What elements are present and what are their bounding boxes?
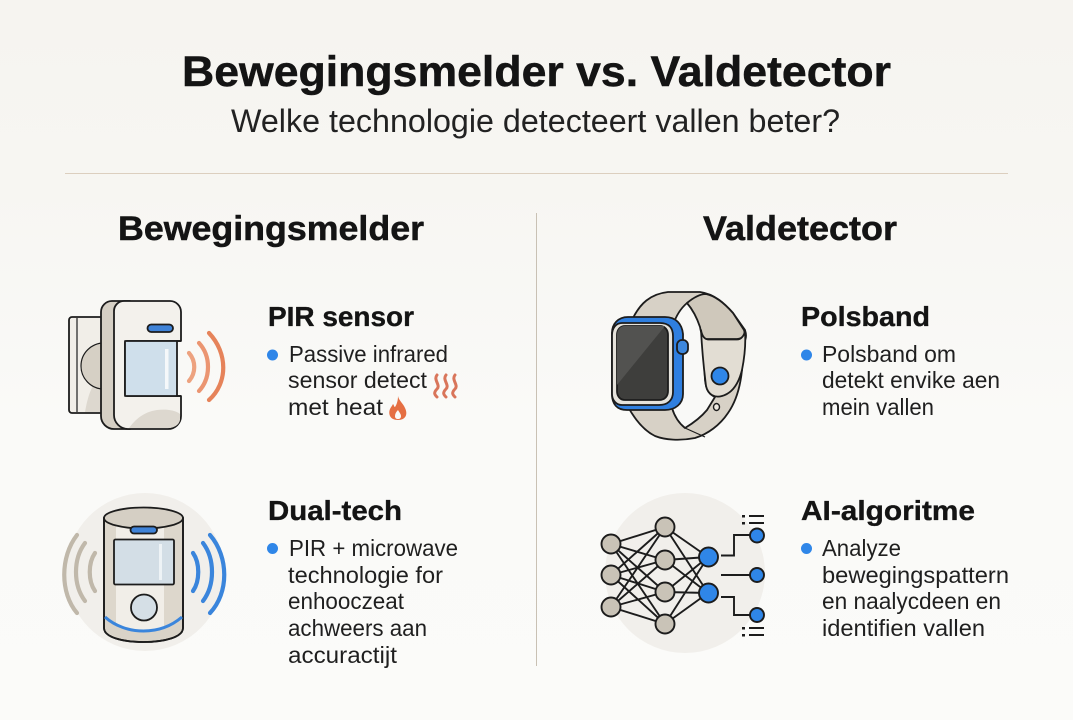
text: Polsband: Polsband om [822,341,956,367]
text: PIR sensor: PIR sensor [268,301,414,332]
icon: flame [389,396,406,420]
icon: neural network [602,493,765,653]
text: AI-algoritme [801,495,1009,641]
text: Dual-tech [267,495,458,668]
text: Dual-tech: enhooczeat [288,588,405,614]
text: Polsband: mein vallen [822,394,934,420]
icon: heat waves [435,375,456,397]
text: Dual-tech: Dual-tech [268,495,402,526]
title: Bewegingsmelder vs. Valdetector [182,48,891,96]
text: Dual-tech: accuractijt [288,642,398,668]
text: PIR sensor: Passive infrared [289,341,448,367]
text: Polsband [801,301,1000,420]
text: AI-algoritme: Analyze [822,535,901,561]
icon: PIR sensor [69,301,181,429]
icon: smartwatch [612,292,746,440]
text: AI-algoritme: AI-algoritme [801,495,975,526]
text: AI-algoritme: identifien vallen [822,615,985,641]
text: Dual-tech: PIR + microwave [289,535,458,561]
text: Polsband: Polsband [801,301,930,332]
icon: grey and blue waves [64,535,224,613]
heading: Bewegingsmelder: Bewegingsmelder [118,210,424,248]
text: AI-algoritme: bewegingspattern [822,562,1009,588]
icon: dual-tech sensor [66,493,224,651]
text: AI-algoritme: en naalycdeen en [822,588,1001,614]
text: Polsband: detekt envike aen [822,367,1000,393]
icon: orange signal waves [189,333,223,400]
subtitle: Welke technologie detecteert vallen beter? [231,103,840,139]
panel: Bewegingsmelder [64,210,458,668]
heading: Valdetector: Valdetector [703,210,897,248]
text: PIR sensor [267,301,448,420]
text: Dual-tech: technologie for [288,562,443,588]
text: Dual-tech: achweers aan [288,615,427,641]
panel: Valdetector [602,210,1009,653]
text: PIR sensor: met heat [288,394,384,420]
text: PIR sensor: sensor detect [288,367,428,393]
